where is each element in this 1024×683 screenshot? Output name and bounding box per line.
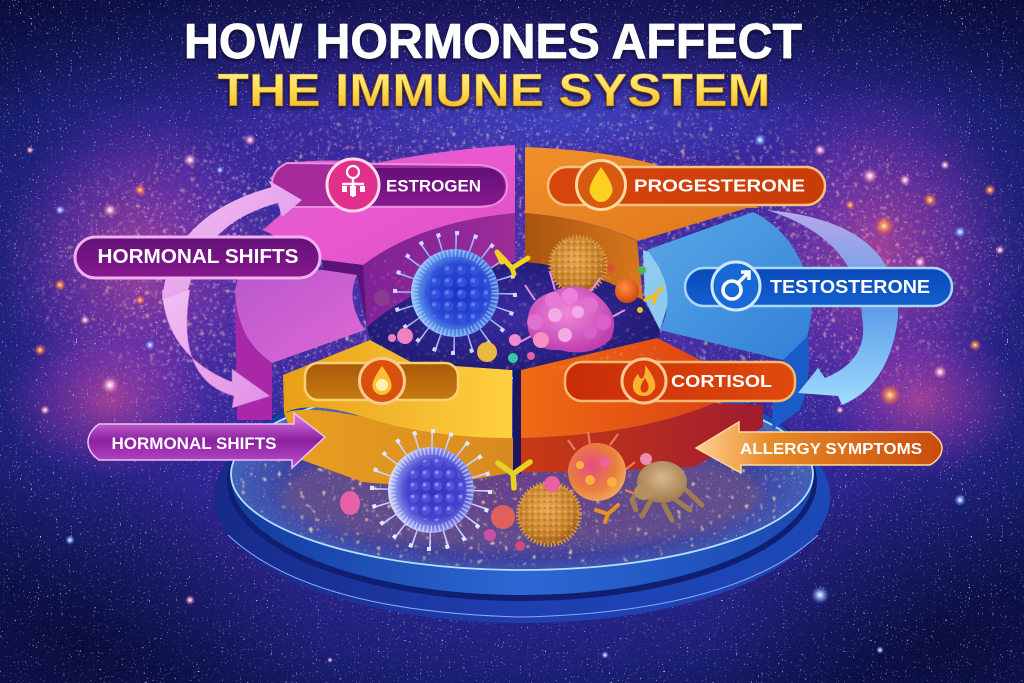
pink left surface <box>235 270 365 363</box>
segment: yellow lower-left block <box>283 340 514 484</box>
blue top surface <box>647 212 812 360</box>
orange inner wall <box>525 213 643 300</box>
platform: layered blue disc <box>214 361 830 623</box>
blue left bevel <box>643 250 669 330</box>
segment: blue testosterone block <box>643 212 812 430</box>
dust mite <box>632 461 702 520</box>
icon: male symbol <box>712 262 760 310</box>
hormonal shifts text: HORMONAL SHIFTS <box>98 246 298 268</box>
platform lower ring <box>214 371 830 623</box>
icon: estrogen symbol <box>327 159 379 211</box>
segment: pink estrogen block <box>235 145 515 420</box>
arrow: curved pink upper <box>162 180 302 300</box>
antibody: yellow upper center <box>497 252 528 274</box>
pink side wall <box>235 290 272 420</box>
segment: orange progesterone block <box>525 147 760 300</box>
progesterone text: PROGESTERONE <box>634 176 805 196</box>
cell: large blue virus upper <box>395 233 515 353</box>
hormonal shifts lower text: HORMONAL SHIFTS <box>112 435 276 453</box>
arrow: curved pink lower <box>162 290 270 408</box>
cell: small pink <box>340 491 360 515</box>
platform glass top <box>230 378 814 572</box>
cell: blue virus lower <box>372 431 490 549</box>
label: testosterone pill <box>685 262 952 310</box>
cell: orange spotted lower <box>563 432 636 501</box>
icon: flame <box>622 359 666 403</box>
platform upper disc <box>227 361 817 601</box>
label: estrogen pill <box>272 159 507 211</box>
label: yellow unnamed pill <box>305 358 458 404</box>
cortisol text: CORTISOL <box>671 371 772 391</box>
cell: pink bumpy <box>520 272 625 352</box>
red top surface <box>521 338 765 438</box>
pink top surface <box>263 145 515 265</box>
title line 2: THE IMMUNE SYSTEM <box>218 64 770 116</box>
cell: small red <box>491 505 515 529</box>
antibody: yellow upper right <box>645 288 662 303</box>
small particles cluster <box>374 264 646 363</box>
yellow side wall <box>284 410 514 484</box>
arrow: curved blue <box>767 210 898 405</box>
arrow label: hormonal shifts lower <box>88 413 325 468</box>
label: hormonal shifts pill <box>75 237 320 278</box>
antibody: yellow lower center <box>498 462 530 488</box>
label: progesterone pill <box>548 160 825 210</box>
estrogen text: ESTROGEN <box>386 176 481 196</box>
cell: small yellow ball <box>477 342 497 362</box>
segment: red lower-right block <box>521 338 765 472</box>
antibody: multicolor <box>596 505 618 522</box>
center: galaxy field <box>367 260 660 370</box>
small pink clusters <box>484 453 652 551</box>
testosterone text: TESTOSTERONE <box>770 277 930 297</box>
gap between lower blocks <box>513 370 521 474</box>
icon: yellow droplet <box>576 160 626 210</box>
icon: flame drop <box>360 358 404 404</box>
pink inner wall <box>363 213 515 327</box>
red side wall <box>521 403 763 472</box>
cell: orange fuzzy lower <box>518 483 580 545</box>
title line 1: HOW HORMONES AFFECT <box>184 15 802 69</box>
orange top surface <box>525 147 760 241</box>
blue side wall <box>772 335 809 430</box>
cell: orange fuzzy upper <box>550 237 606 293</box>
yellow top surface <box>283 340 512 438</box>
pink dark step <box>323 260 367 327</box>
arrow label: allergy symptoms <box>696 422 942 473</box>
label: cortisol pill <box>565 359 795 403</box>
allergy symptoms text: ALLERGY SYMPTOMS <box>740 441 922 458</box>
cell: small orange ball <box>615 279 639 303</box>
